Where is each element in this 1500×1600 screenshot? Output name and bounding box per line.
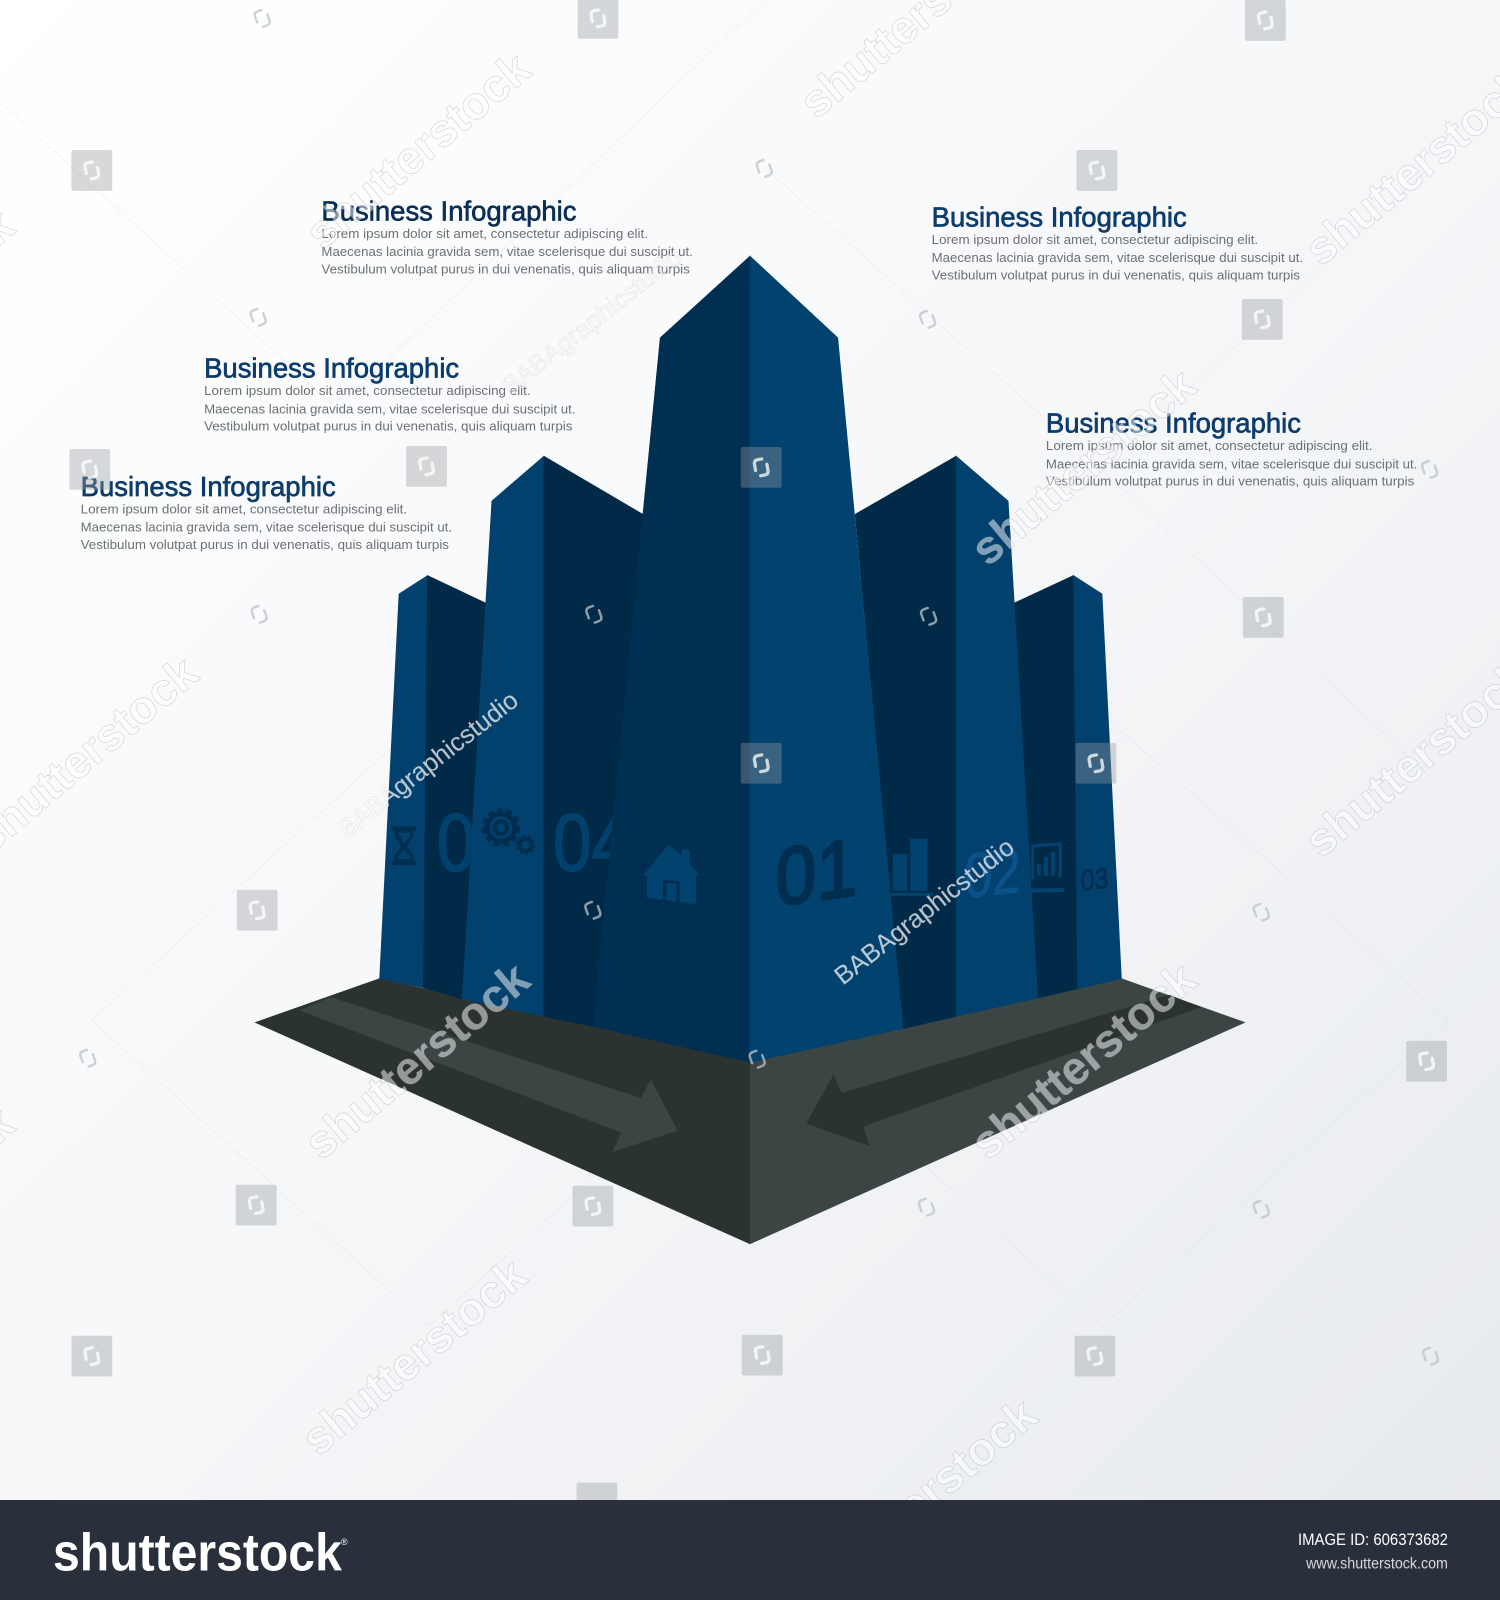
heading: Business Infographic bbox=[321, 195, 577, 226]
second right light face bbox=[956, 456, 1038, 1016]
watermark text: shutterstock bbox=[961, 952, 1206, 1169]
body text: Maecenas lacinia gravida sem, vitae scelerisque dui suscipit ut. bbox=[932, 250, 1303, 265]
heading: Business Infographic bbox=[204, 353, 459, 384]
ground right face bbox=[750, 979, 1245, 1244]
second left light face bbox=[462, 456, 544, 1016]
body text: Vestibulum volutpat purus in dui venenatis, quis aliquam turpis bbox=[321, 261, 690, 276]
number 01: 01 bbox=[776, 820, 857, 924]
watermark text: BABAgraphicstudio bbox=[829, 833, 1020, 990]
body text: Lorem ipsum dolor sit amet, consectetur adipiscing elit. bbox=[204, 383, 531, 398]
watermark text: shutterstock bbox=[294, 952, 539, 1169]
number 05: 05 bbox=[437, 797, 514, 889]
second right dark face bbox=[855, 456, 956, 1029]
tower: second right bbox=[855, 456, 1038, 1029]
arrow: right, pointing to the centre bbox=[806, 995, 1201, 1146]
watermark text: shutterstock bbox=[802, 1387, 1046, 1600]
heading: Business Infographic bbox=[1046, 408, 1301, 439]
text block: lower left bbox=[81, 471, 452, 552]
text block: middle left bbox=[204, 353, 576, 434]
footer logo: shutterstock bbox=[53, 1523, 342, 1582]
body text: Lorem ipsum dolor sit amet, consectetur adipiscing elit. bbox=[932, 232, 1258, 247]
body text: Lorem ipsum dolor sit amet, consectetur adipiscing elit. bbox=[321, 226, 648, 241]
centre light face bbox=[750, 256, 903, 1062]
body text: Lorem ipsum dolor sit amet, consectetur adipiscing elit. bbox=[1046, 438, 1372, 453]
watermark text: shutterstock bbox=[295, 41, 540, 259]
body text: Maecenas lacinia gravida sem, vitae scelerisque dui suscipit ut. bbox=[81, 520, 452, 535]
body text: Vestibulum volutpat purus in dui venenatis, quis aliquam turpis bbox=[1046, 474, 1415, 489]
icon: house bbox=[643, 845, 700, 904]
number 03: 03 bbox=[1081, 861, 1109, 897]
tower: far right bbox=[1014, 576, 1121, 998]
number 02: 02 bbox=[964, 836, 1021, 912]
body text: Maecenas lacinia gravida sem, vitae scelerisque dui suscipit ut. bbox=[1046, 456, 1417, 471]
body text: Vestibulum volutpat purus in dui venenatis, quis aliquam turpis bbox=[81, 537, 449, 552]
tower: far left bbox=[380, 576, 514, 999]
body text: Maecenas lacinia gravida sem, vitae scelerisque dui suscipit ut. bbox=[204, 401, 576, 416]
body text: Vestibulum volutpat purus in dui venenatis, quis aliquam turpis bbox=[204, 419, 573, 434]
ground platform bbox=[255, 979, 1245, 1244]
body text: Maecenas lacinia gravida sem, vitae scelerisque dui suscipit ut. bbox=[321, 244, 693, 259]
number 04: 04 bbox=[553, 797, 630, 889]
far right dark face bbox=[1014, 576, 1078, 998]
arrow: left, pointing to the centre bbox=[299, 997, 678, 1152]
tower: centre bbox=[593, 256, 903, 1062]
far left light face bbox=[380, 576, 428, 988]
footer bar bbox=[0, 1500, 1500, 1600]
icon: bar chart bbox=[887, 839, 933, 896]
body text: Lorem ipsum dolor sit amet, consectetur adipiscing elit. bbox=[81, 501, 407, 516]
watermark text: BABAgraphicstudio bbox=[497, 243, 687, 401]
text block: top right bbox=[932, 202, 1303, 283]
tower: second left bbox=[462, 456, 643, 1027]
footer image id: IMAGE ID: 606373682 bbox=[1298, 1531, 1448, 1549]
body text: Vestibulum volutpat purus in dui venenatis, quis aliquam turpis bbox=[932, 268, 1300, 283]
icon: hourglass bbox=[392, 827, 416, 865]
watermark text: shutterstock bbox=[961, 358, 1206, 575]
watermark text: shutterstock bbox=[291, 1248, 536, 1465]
icon: laptop chart bbox=[1029, 844, 1064, 891]
footer website: www.shutterstock.com bbox=[1305, 1555, 1448, 1572]
centre dark face bbox=[593, 256, 750, 1062]
far left dark face bbox=[423, 576, 486, 999]
heading: Business Infographic bbox=[81, 471, 336, 502]
second left dark face bbox=[544, 456, 643, 1027]
watermark text: BABAgraphicstudio bbox=[333, 686, 524, 844]
footer registered mark: ® bbox=[341, 1537, 348, 1547]
icon: gears bbox=[485, 811, 534, 853]
text block: middle right bbox=[1046, 408, 1417, 489]
heading: Business Infographic bbox=[932, 202, 1187, 233]
ground left face bbox=[255, 979, 750, 1244]
text block: top left bbox=[321, 195, 693, 276]
far right light face bbox=[1073, 576, 1121, 989]
